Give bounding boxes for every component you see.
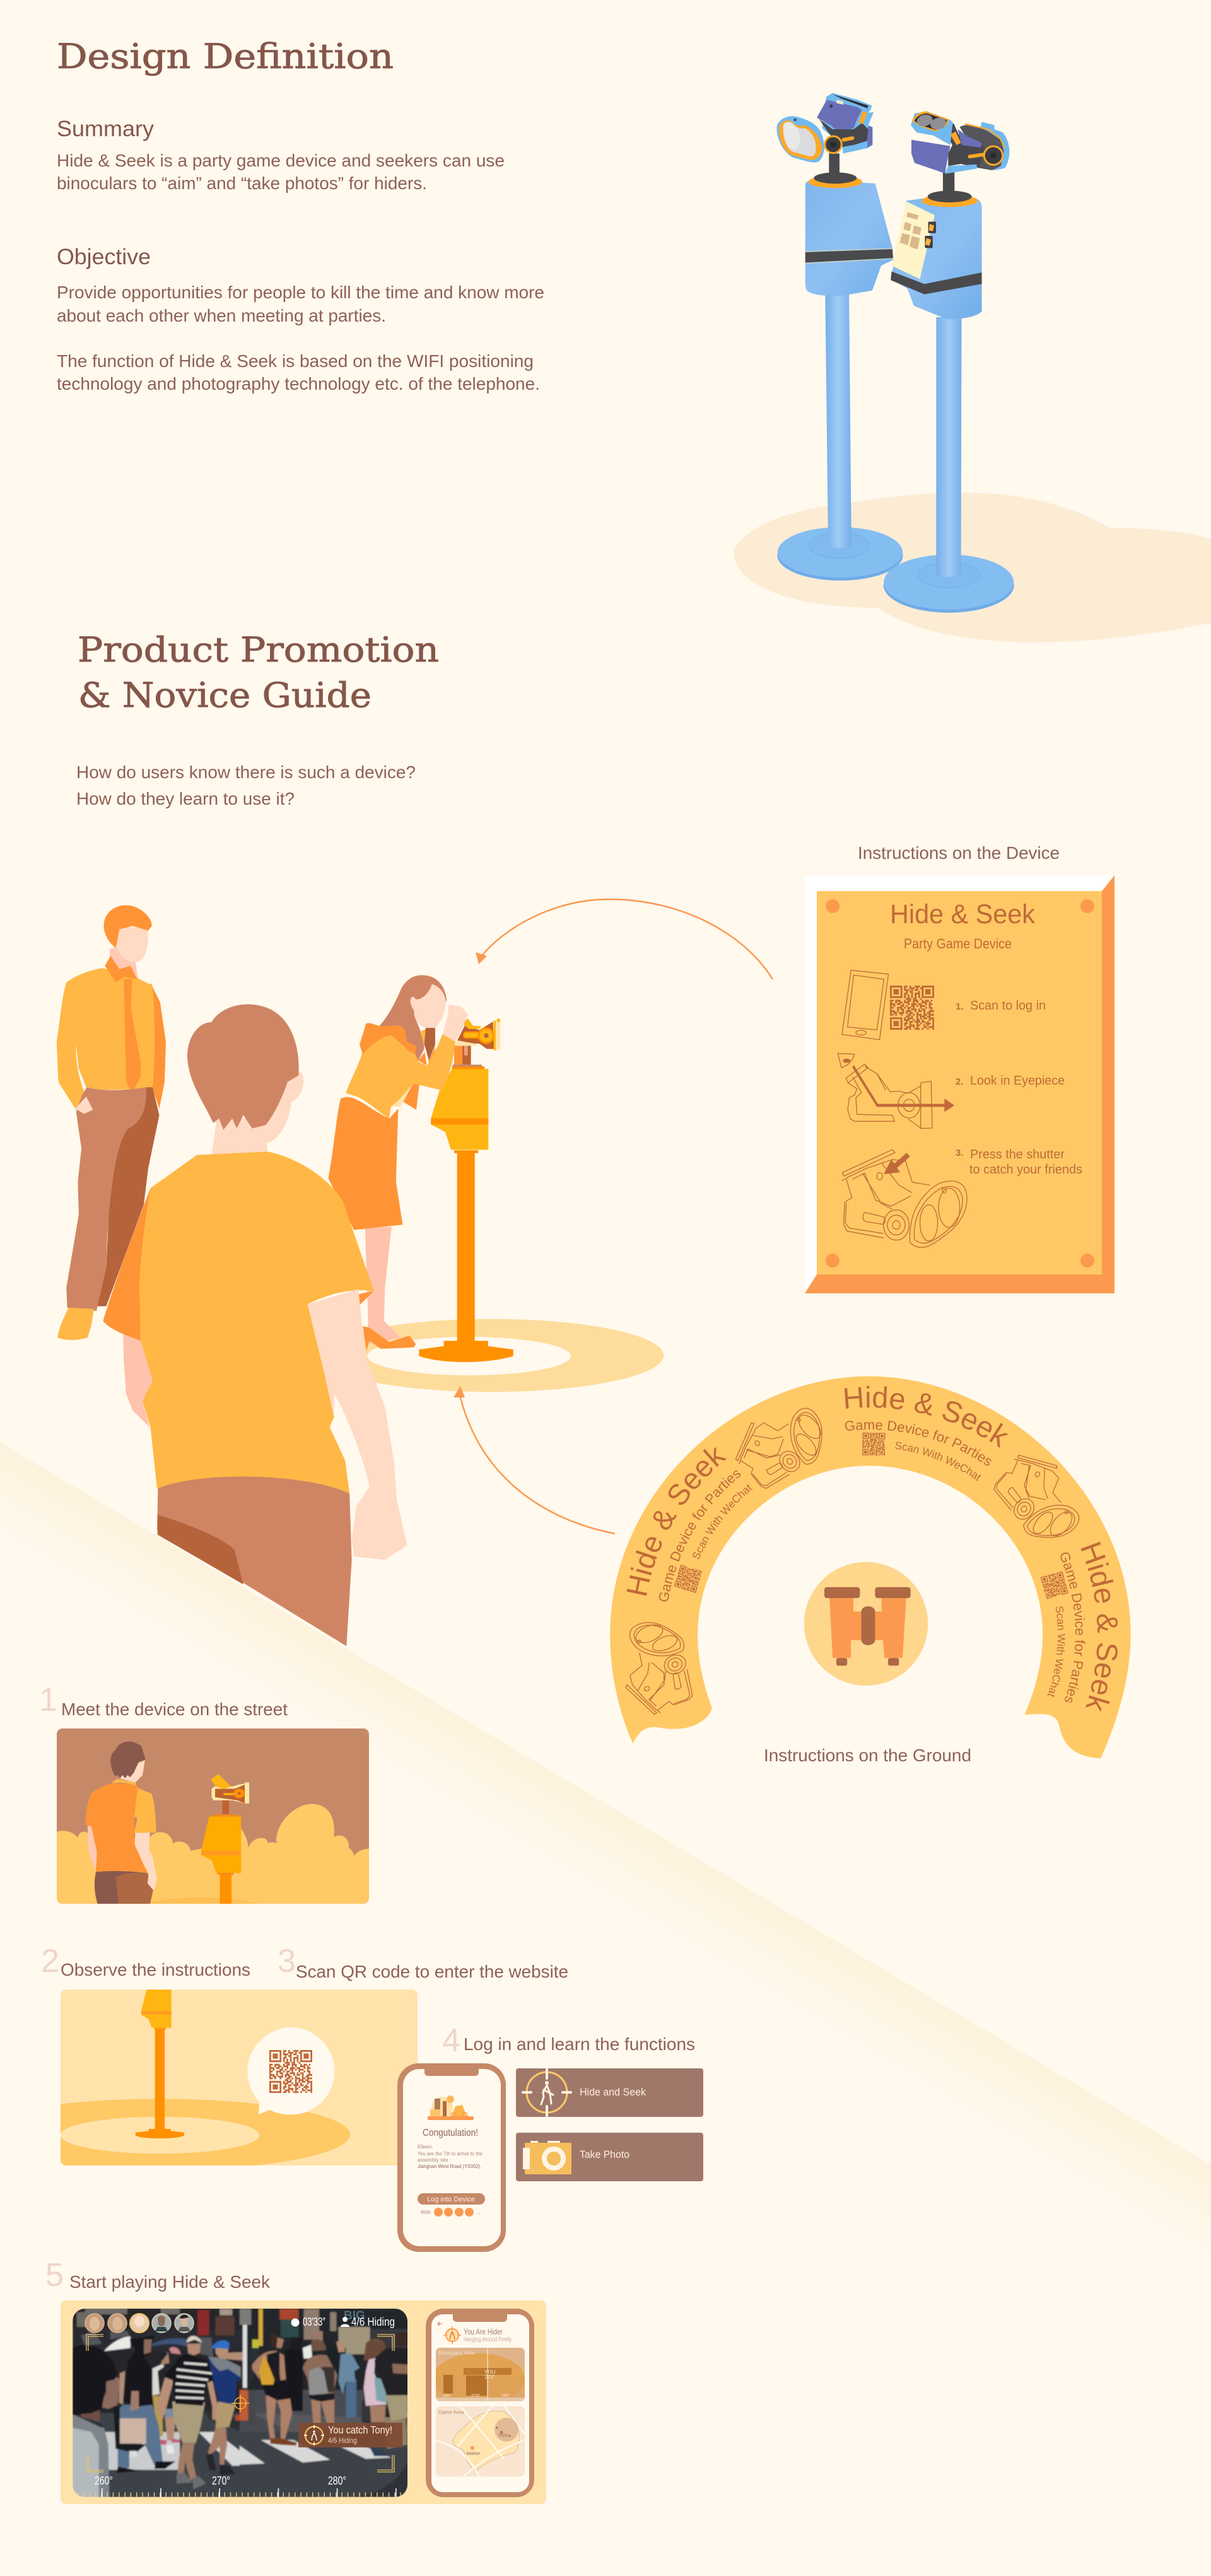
clouds xyxy=(57,1804,369,1904)
card: hide and seek function: Hide and Seek xyxy=(580,2086,646,2098)
viewer on post xyxy=(201,1774,249,1904)
hud: timer and hiding count xyxy=(291,2317,395,2328)
arch text group: left: Scan With WeChat xyxy=(693,1484,752,1559)
step 2 heading xyxy=(41,1943,250,1979)
card: game area map: Seeker xyxy=(466,2452,481,2456)
front man xyxy=(103,1005,407,1646)
step 2 heading: Observe the instructions xyxy=(61,1960,250,1979)
hud: avatars xyxy=(85,2314,194,2333)
right device xyxy=(884,112,1014,613)
arch text group: left: Game Device for Parties xyxy=(659,1471,740,1602)
card: binoculars' view: 270° xyxy=(471,2393,481,2398)
plaque heading: Hide & Seek xyxy=(890,899,1035,930)
step 4 heading: 4 xyxy=(442,2022,460,2059)
plaque heading: Party Game Device xyxy=(904,936,1012,952)
hider status text: Hanging Around Freely xyxy=(464,2336,512,2343)
text block: objective: technology and photography technology etc. of the telephone. xyxy=(57,374,540,393)
step 1 heading xyxy=(39,1682,288,1719)
card: binoculars' view: Binoculars' View xyxy=(438,2350,476,2356)
step 5 heading: 5 xyxy=(45,2257,64,2293)
card: binoculars' view: 280° xyxy=(501,2393,511,2398)
text block: questions: How do they learn to use it? xyxy=(76,789,295,808)
text block: objective: about each other when meeting at parties. xyxy=(57,306,386,325)
arch band xyxy=(610,1377,1131,1758)
target on the ground xyxy=(61,2099,350,2165)
step 3 text xyxy=(956,1148,1082,1177)
arch text group: right xyxy=(1041,1541,1118,1712)
title: Product Promotion & Novice Guide: & Novice Guide xyxy=(78,675,371,715)
phone: hider screen xyxy=(426,2309,534,2497)
step 1 heading: 1 xyxy=(39,1682,57,1718)
step 2 text: Look in Eyepiece xyxy=(970,1074,1065,1088)
text block: objective: Provide opportunities for people to kill the time and know more xyxy=(57,283,544,302)
callout: caught player xyxy=(298,2423,402,2447)
arch text group: top: Game Device for Parties xyxy=(845,1421,992,1466)
sign lettering in the photo: BIG xyxy=(344,2309,365,2322)
step 3 icon: shutter xyxy=(841,1150,967,1247)
step 3 heading: 3 xyxy=(278,1943,296,1979)
callout: caught player: 4/6 Hiding xyxy=(328,2436,357,2445)
card: game area map xyxy=(436,2406,525,2476)
step 1 heading: Meet the device on the street xyxy=(61,1699,288,1719)
illustration: people around the device xyxy=(57,905,664,1646)
hair xyxy=(380,975,447,1061)
step 2 heading: 2 xyxy=(41,1943,59,1979)
card: hide and seek function xyxy=(516,2068,703,2118)
blouse xyxy=(346,1023,455,1118)
hud: bearing ruler: 270° xyxy=(212,2474,230,2487)
step 5 heading xyxy=(45,2257,271,2293)
arrow: from device instructions to viewer xyxy=(476,899,773,979)
title: Product Promotion & Novice Guide xyxy=(78,630,439,715)
QR code xyxy=(269,2051,312,2092)
title: Design Definition: Design Definition xyxy=(57,37,394,76)
card: binoculars' view xyxy=(433,2348,525,2404)
ground ring xyxy=(319,1319,664,1392)
card: binoculars' view: YOU xyxy=(484,2369,496,2375)
heading: instructions on the device: Instructions on the Device xyxy=(858,843,1060,863)
arch text group: right: Hide & Seek xyxy=(1081,1541,1118,1712)
ground shadow blob xyxy=(734,492,1211,643)
text block: summary: Summary xyxy=(57,117,155,141)
step 3 text: Press the shutter xyxy=(970,1148,1065,1162)
heading: instructions on the ground: Instructions on the Ground xyxy=(764,1746,971,1765)
step 1 icon: phone and QR xyxy=(842,970,934,1040)
arch device outlines xyxy=(606,1387,1098,1722)
hud: bearing ruler xyxy=(78,2474,404,2495)
text block: questions: How do users know there is such a device? xyxy=(76,762,416,782)
congratulation text xyxy=(418,2128,483,2169)
step 4 heading: Log in and learn the functions xyxy=(464,2034,695,2054)
step 5 heading: Start playing Hide & Seek xyxy=(69,2272,271,2292)
hider status text: You Are Hider xyxy=(464,2327,503,2336)
step 2 icon: eyepiece xyxy=(838,1054,954,1129)
speech bubble xyxy=(247,2027,335,2114)
card: binoculars' view: 273° xyxy=(484,2374,495,2380)
hud: timer and hiding count: 4/6 Hiding xyxy=(351,2316,395,2328)
post and base xyxy=(419,1151,513,1362)
arch text group: top: Scan With WeChat xyxy=(895,1442,981,1481)
person from behind xyxy=(85,1742,157,1904)
card: take photo function: Take Photo xyxy=(580,2148,629,2160)
step 3 text: to catch your friends xyxy=(969,1163,1082,1177)
step 4 heading xyxy=(442,2022,695,2059)
congratulation text: Eileen, xyxy=(418,2144,433,2150)
plaque frame xyxy=(805,875,1114,1293)
panel: instruction plaque xyxy=(805,875,1114,1293)
arch text group: right: Scan With WeChat xyxy=(1047,1607,1065,1698)
right half of the crowd xyxy=(240,2308,410,2497)
viewer xyxy=(431,1018,500,1153)
step 3 heading: Scan QR code to enter the website xyxy=(296,1962,568,1981)
title: Product Promotion & Novice Guide: Product Promotion xyxy=(78,630,439,670)
hud: timer and hiding count: 03′33″ xyxy=(303,2316,325,2328)
3D device render pair xyxy=(734,93,1211,643)
plaque heading xyxy=(890,899,1035,952)
hud: aim reticle xyxy=(231,2394,249,2412)
left half of the crowd xyxy=(73,2308,243,2497)
standing man xyxy=(57,905,166,1340)
panel: step 1 street scene xyxy=(57,1728,369,1918)
illustration: city xyxy=(428,2095,474,2120)
inner hair and collar detail xyxy=(418,1028,436,1066)
photo: street crowd viewfinder xyxy=(73,2308,410,2497)
woman at the viewer xyxy=(346,975,500,1153)
avatars: ... xyxy=(476,2210,481,2215)
login button: Log into Device xyxy=(427,2196,475,2203)
card: game area map: YOU xyxy=(498,2433,508,2438)
arch text group: top: Hide & Seek xyxy=(844,1386,1008,1448)
text block: summary xyxy=(57,117,505,193)
congratulation text: Jiangnan West Road (YX002). xyxy=(418,2164,481,2169)
text block: summary: binoculars to “aim” and “take photos” for hiders. xyxy=(57,173,427,193)
card: take photo function xyxy=(516,2133,703,2181)
icon: camera xyxy=(523,2141,571,2174)
face xyxy=(411,984,446,1028)
step 1 text: 1. xyxy=(956,1001,964,1012)
hider status text xyxy=(464,2327,512,2343)
post xyxy=(136,1990,184,2138)
left device xyxy=(777,93,903,581)
text block: objective: Objective xyxy=(57,245,151,269)
callout: caught player: You catch Tony! xyxy=(328,2424,392,2436)
login button xyxy=(418,2193,485,2205)
congratulation text: assembly site : xyxy=(418,2157,451,2163)
card: binoculars' view: 260° xyxy=(443,2393,452,2398)
card: game area map: Game Area xyxy=(438,2410,464,2415)
hud: bearing ruler: 260° xyxy=(95,2474,113,2487)
step 2 text: 2. xyxy=(956,1076,964,1087)
back arrow xyxy=(438,2322,442,2326)
icon: target with walker xyxy=(523,2069,571,2118)
woman legs and skirt xyxy=(329,1097,416,1351)
step 3 text: 3. xyxy=(956,1148,964,1158)
text block: objective xyxy=(57,245,544,393)
panel: ground arch instructions xyxy=(610,1376,1131,1758)
icon: binoculars medallion xyxy=(804,1562,928,1686)
hands xyxy=(443,1005,468,1042)
avatars xyxy=(421,2208,481,2217)
text block: summary: Hide & Seek is a party game device and seekers can use xyxy=(57,151,505,170)
diagonal section band xyxy=(0,1442,1211,2576)
congratulation text: Congutulation! xyxy=(423,2128,478,2138)
step 1 text: Scan to log in xyxy=(970,999,1046,1013)
text block: objective: The function of Hide & Seek is based on the WIFI positioning xyxy=(57,351,534,371)
arch text group: top xyxy=(844,1386,1008,1481)
avatars: With xyxy=(421,2210,431,2215)
congratulation text: You are the 7th to arrive to the xyxy=(418,2151,483,2157)
panel: step 2-3 instructions scene xyxy=(61,1990,418,2165)
panel: step 5 gameplay xyxy=(61,2300,546,2504)
hud: viewfinder brackets xyxy=(86,2334,394,2472)
arrow: from ground instructions to viewer xyxy=(453,1386,615,1534)
hud: bearing ruler: 280° xyxy=(328,2474,346,2487)
icon: hider target xyxy=(443,2326,461,2344)
phone: login screen xyxy=(397,2063,506,2252)
step 3 heading xyxy=(278,1943,568,1981)
arch text group: left: Hide & Seek xyxy=(627,1447,727,1595)
arch text group: right: Game Device for Parties xyxy=(1060,1553,1085,1703)
text block: questions xyxy=(76,762,416,808)
photo scene xyxy=(73,2308,410,2497)
